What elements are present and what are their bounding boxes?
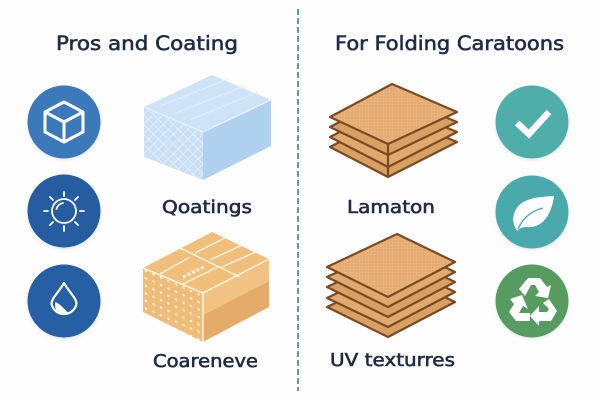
illustration: textured sheets stack [327,234,455,337]
icon: water drop badge [28,264,100,338]
illustration: cardboard box [143,232,269,342]
label: qoatings: Qoatings [162,197,252,218]
label: lamaton: Lamaton [347,197,435,218]
icon: check badge [496,86,568,158]
icon: cube badge [28,86,100,158]
label: coareneve: Coareneve [153,351,258,372]
label: uv texturres: UV texturres [330,350,455,371]
icon: recycle badge [496,264,568,338]
illustration: blue coated box [144,75,271,180]
center divider [297,9,299,391]
icon: leaf badge [496,176,568,248]
illustration: laminated sheets stack [330,84,457,177]
heading: for folding caratoons: For Folding Caratoons [335,32,564,55]
icon: sun badge [28,174,100,248]
heading: pros and coating: Pros and Coating [56,32,238,55]
